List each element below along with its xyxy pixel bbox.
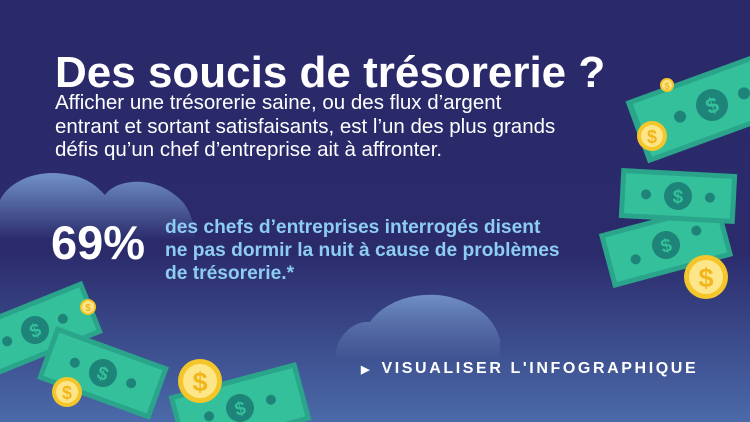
bill: top right: $: [702, 92, 722, 119]
intro text: entrant et sortant satisfaisants, est l’un des plus grands: [55, 114, 555, 138]
intro text: [55, 91, 555, 161]
coins: $: [62, 383, 72, 403]
bill: bottom left 1: [0, 281, 103, 379]
cloud: left: [0, 173, 195, 240]
bill: bottom left 2: [37, 326, 169, 420]
title: Des soucis de trésorerie ?: [55, 48, 605, 97]
call to action: ▶ VISUALISER L'INFOGRAPHIQUE: [361, 360, 698, 377]
coins: $: [647, 127, 657, 147]
bill: bottom center: $: [233, 398, 249, 421]
bill: bottom center: [168, 362, 312, 422]
intro text: défis qu’un chef d’entreprise ait à affronter.: [55, 138, 442, 161]
coins: $: [664, 81, 670, 91]
intro text: Afficher une trésorerie saine, ou des flux d’argent: [55, 91, 501, 114]
coins: $: [192, 367, 208, 397]
coins: [52, 78, 728, 407]
bill: top right: [626, 47, 750, 163]
bill: bottom left 2: $: [94, 363, 111, 386]
bill: middle right: $: [672, 187, 684, 208]
bill: lower right: [599, 202, 733, 288]
bill: middle right: [619, 168, 737, 224]
stat description: ne pas dormir la nuit à cause de problèmes: [165, 240, 560, 261]
coins: $: [698, 263, 714, 293]
stat description: des chefs d’entreprises interrogés disent: [165, 217, 540, 238]
cloud: right: [335, 295, 500, 360]
coins: $: [85, 303, 91, 314]
bill: bottom left 1: $: [27, 320, 45, 343]
stat: 69%: 69%: [51, 216, 145, 269]
bill: lower right: $: [659, 235, 675, 258]
stat description: [165, 217, 560, 284]
stat description: de trésorerie.*: [165, 263, 294, 284]
